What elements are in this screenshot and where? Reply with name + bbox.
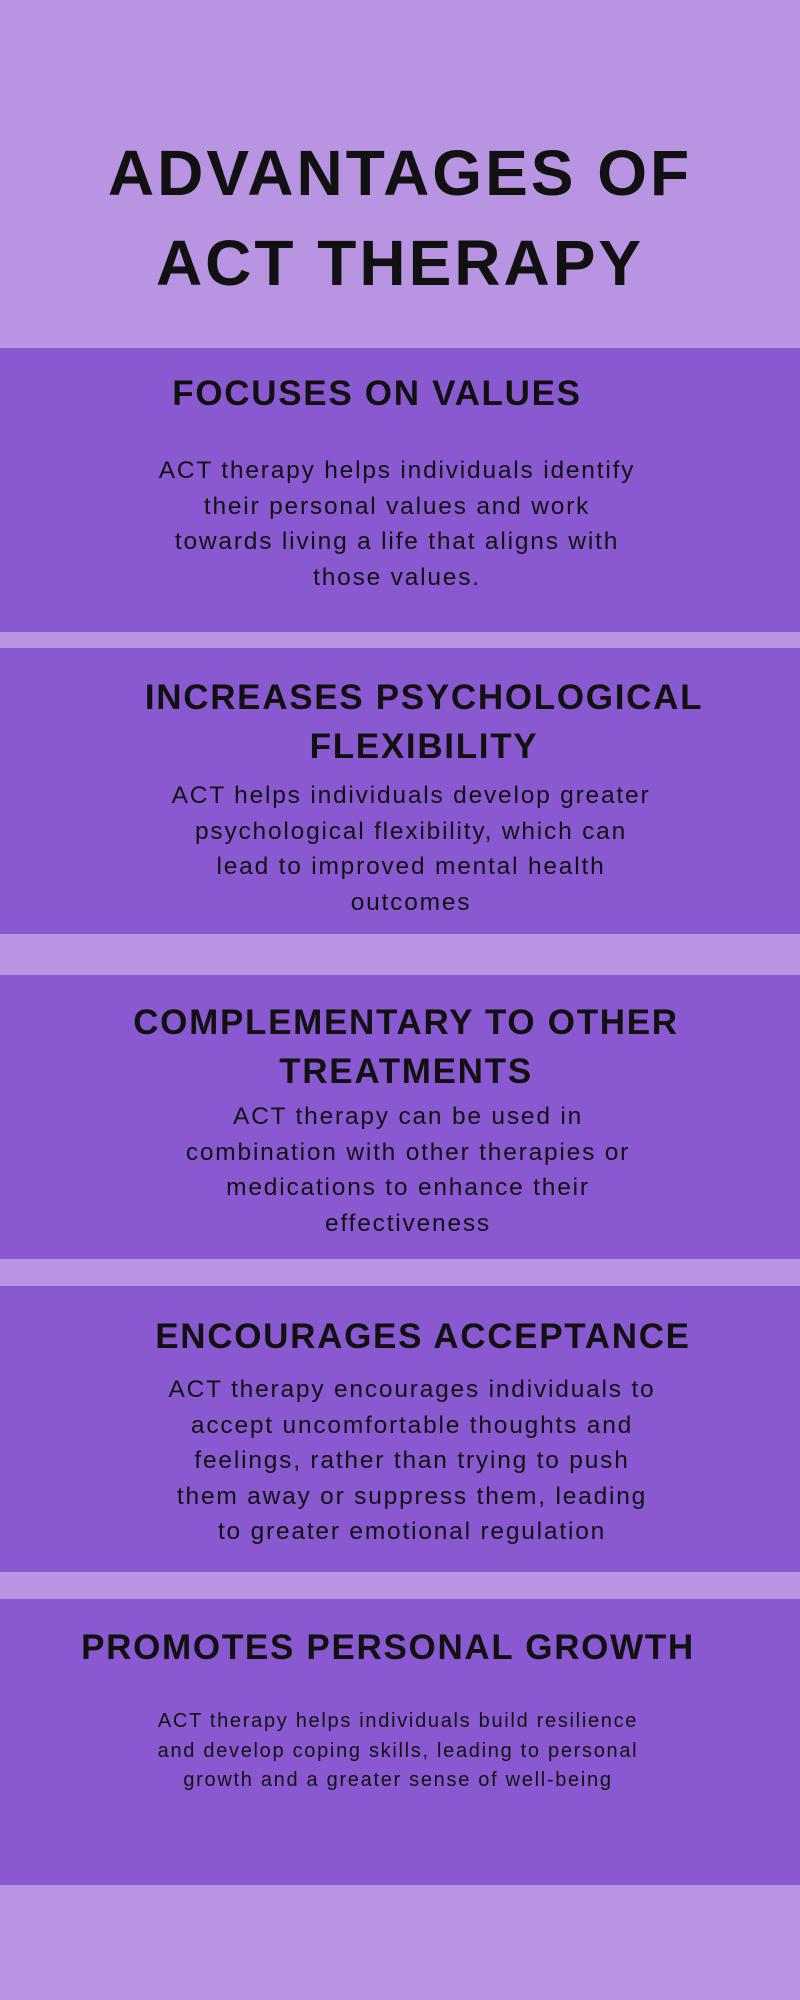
heading: ENCOURAGES ACCEPTANCE: [155, 1317, 691, 1356]
panel: focuses on values: [0, 348, 800, 632]
text block: medications to enhance their: [226, 1174, 590, 1201]
text block: ACT therapy encourages individuals to: [168, 1376, 655, 1403]
text block: and develop coping skills, leading to personal: [158, 1740, 638, 1762]
text block: [168, 1376, 655, 1545]
heading: INCREASES PSYCHOLOGICAL: [145, 678, 703, 717]
text block: growth and a greater sense of well-being: [183, 1769, 613, 1791]
text block: ACT helps individuals develop greater: [172, 782, 650, 809]
text block: those values.: [313, 564, 481, 590]
text block: them away or suppress them, leading: [177, 1482, 647, 1510]
text block: ACT therapy helps individuals build resilience: [158, 1710, 638, 1732]
heading: [145, 678, 703, 766]
text block: towards living a life that aligns with: [175, 528, 619, 555]
heading: TREATMENTS: [279, 1052, 533, 1091]
panel: personal growth: [0, 1599, 800, 1885]
heading: [133, 1003, 679, 1091]
text block: combination with other therapies or: [186, 1138, 630, 1166]
text block: feelings, rather than trying to push: [194, 1447, 630, 1474]
title: ACT THERAPY: [156, 227, 644, 299]
text block: ACT therapy helps individuals identify: [159, 457, 635, 484]
text block: [186, 1103, 630, 1236]
panel: complementary: [0, 975, 800, 1259]
heading: COMPLEMENTARY TO OTHER: [133, 1003, 679, 1042]
heading: FOCUSES ON VALUES: [172, 374, 582, 413]
text block: to greater emotional regulation: [218, 1518, 606, 1545]
text block: psychological flexibility, which can: [195, 818, 627, 844]
title: [108, 137, 692, 299]
text block: accept uncomfortable thoughts and: [191, 1412, 633, 1438]
text block: outcomes: [351, 888, 471, 916]
text block: [158, 457, 635, 590]
text block: [172, 782, 650, 916]
text block: ACT therapy can be used in: [233, 1103, 583, 1130]
text block: [158, 1710, 638, 1791]
panel: acceptance: [0, 1286, 800, 1572]
text block: lead to improved mental health: [216, 853, 606, 880]
text block: their personal values and work: [204, 492, 590, 520]
heading: PROMOTES PERSONAL GROWTH: [81, 1628, 695, 1667]
heading: FLEXIBILITY: [310, 727, 538, 766]
panel: psychological flexibility: [0, 648, 800, 934]
title: ADVANTAGES OF: [108, 137, 692, 209]
text block: effectiveness: [325, 1210, 491, 1236]
